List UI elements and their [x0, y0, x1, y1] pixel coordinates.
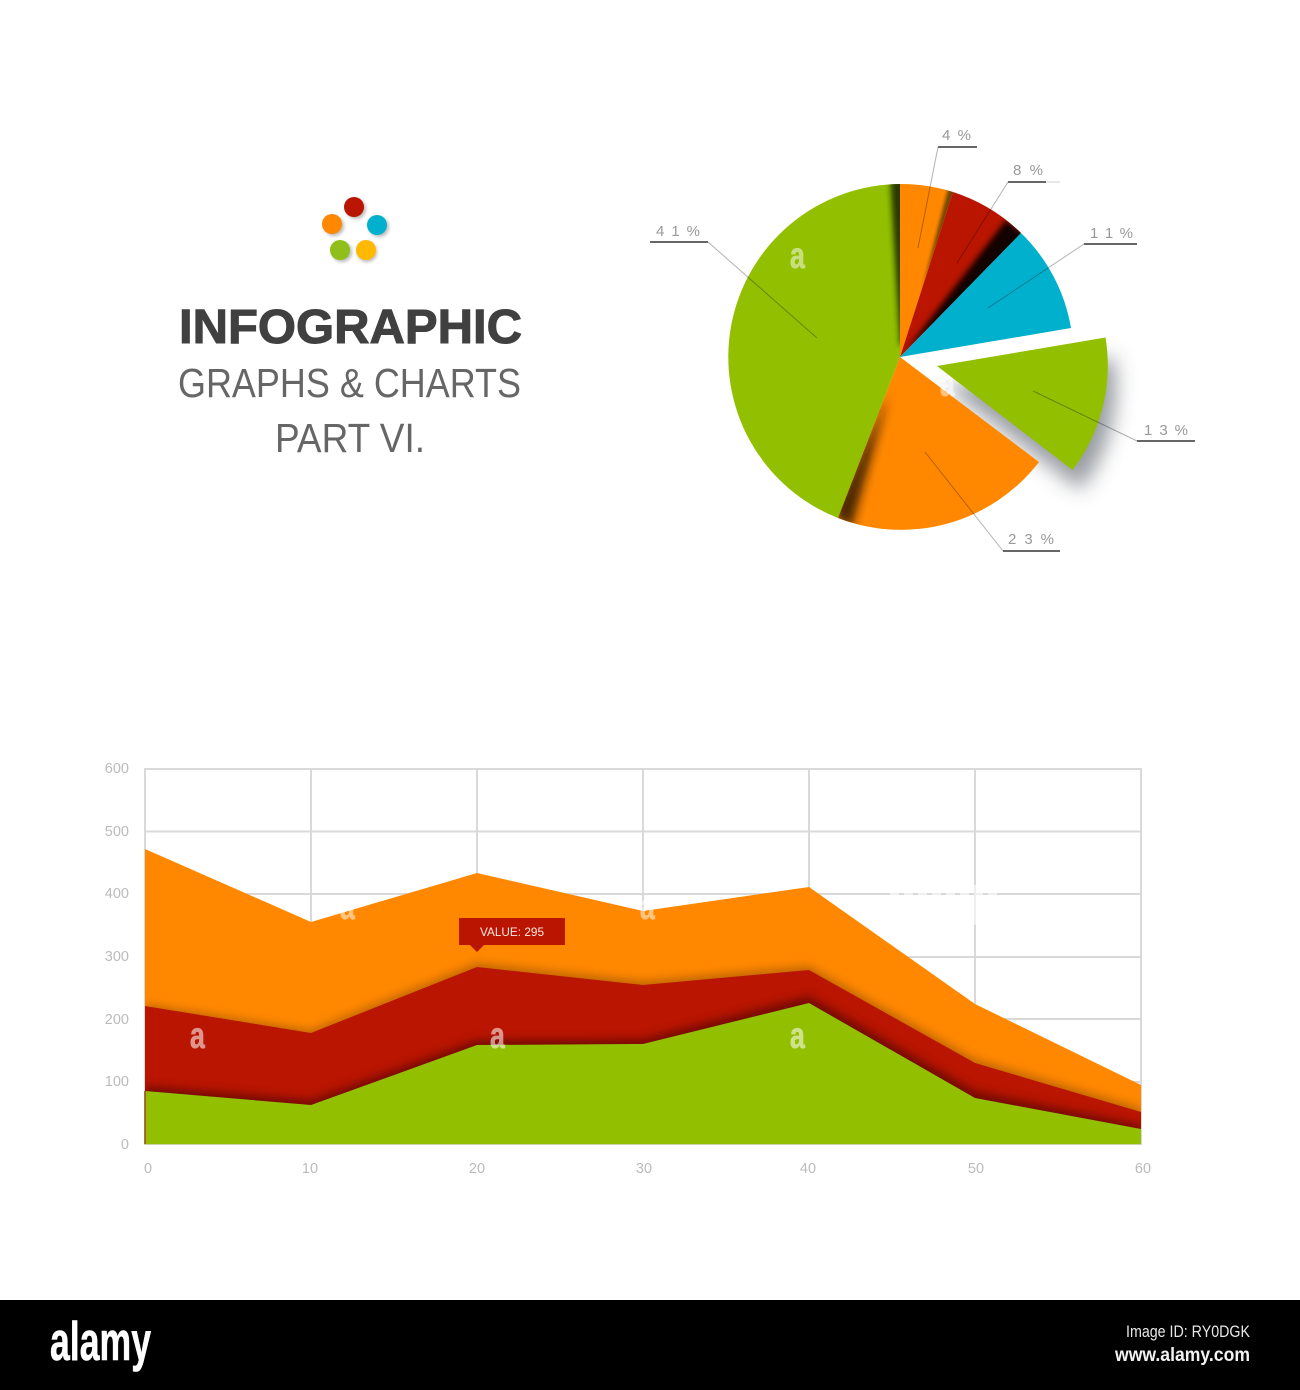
pie leader lines — [708, 147, 1137, 551]
stock watermark marks on chart: a — [790, 1015, 806, 1056]
y axis labels: 100 — [105, 1074, 129, 1090]
label values: 4 % — [942, 127, 971, 144]
area: orange series — [145, 849, 1141, 1144]
tooltip: value 295 — [459, 918, 565, 952]
shadow on orange series — [145, 958, 1141, 1112]
stock watermark marks on chart: a — [640, 886, 656, 927]
pie chart — [728, 175, 1116, 530]
stock watermark marks on pie — [790, 235, 956, 404]
footer bar — [0, 1300, 1300, 1390]
stock watermark marks on chart: a — [340, 886, 356, 927]
y axis labels: 0 — [121, 1137, 129, 1153]
x axis labels: 30 — [636, 1161, 652, 1177]
subtitle: part VI: PART VI. — [275, 415, 425, 461]
y axis labels: 500 — [105, 824, 129, 840]
x axis labels: 20 — [469, 1161, 485, 1177]
pie slice: green 13% exploded — [937, 338, 1108, 470]
label values: 2 3 % — [1008, 531, 1054, 548]
area chart — [145, 769, 1141, 1144]
y axis labels: 300 — [105, 949, 129, 965]
logo: five coloured dots — [322, 197, 389, 262]
faded gridline watermark — [890, 885, 1000, 925]
title: INFOGRAPHIC — [179, 301, 522, 354]
label values — [656, 127, 1188, 548]
stock watermark marks on pie: a — [940, 363, 956, 404]
footer image id: Image ID: RY0DGK — [1126, 1322, 1251, 1341]
x axis labels: 0 — [144, 1161, 152, 1177]
x axis labels: 50 — [968, 1161, 984, 1177]
label underlines — [650, 147, 1195, 551]
x axis labels: 10 — [302, 1161, 318, 1177]
footer url: www.alamy.com — [1114, 1345, 1250, 1366]
stock watermark marks on chart: a — [490, 1015, 506, 1056]
stock watermark marks on chart — [190, 886, 806, 1056]
footer logo: alamy — [50, 1310, 151, 1372]
pie slice: blue 11% — [900, 233, 1071, 357]
shadow on red series — [145, 996, 1141, 1144]
chart grid — [145, 769, 1141, 1144]
area: red series — [145, 967, 1141, 1144]
y axis labels: 400 — [105, 886, 129, 902]
x axis labels — [144, 1161, 1151, 1177]
area: green series — [145, 1003, 1141, 1144]
x axis labels: 60 — [1135, 1161, 1151, 1177]
pie slice: red 8% — [900, 192, 1032, 357]
exploded slice shadow — [945, 358, 1116, 490]
stock watermark marks on pie: a — [790, 235, 806, 276]
y axis labels: 600 — [105, 761, 129, 777]
stock watermark marks on chart: a — [190, 1015, 206, 1056]
label values: 1 3 % — [1144, 422, 1188, 439]
label values: 4 1 % — [656, 223, 700, 240]
pie slice: green 41% — [728, 175, 906, 518]
label values: 1 1 % — [1090, 225, 1133, 242]
pie slice: orange 4% — [900, 184, 958, 357]
tooltip: value 295: VALUE: 295 — [480, 925, 544, 939]
y axis labels: 200 — [105, 1012, 129, 1028]
label values: 8 % — [1013, 162, 1043, 179]
subtitle: graphs and charts: GRAPHS & CHARTS — [178, 360, 521, 406]
x axis labels: 40 — [800, 1161, 816, 1177]
pie slice: orange 23% — [833, 357, 1039, 530]
y axis labels — [105, 761, 129, 1153]
